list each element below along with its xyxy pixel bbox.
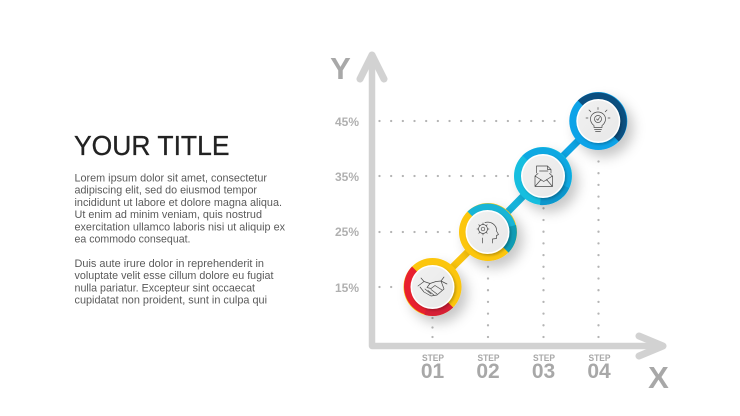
icon: handshake [418,277,447,296]
y-axis percentage labels [335,115,359,295]
icon: head with gear [477,222,498,243]
x-axis step labels: STEP [478,353,500,364]
text block: second paragraph: voluptate velit esse cillum dolore eu fugiat [74,270,274,282]
text block: second paragraph: Duis aute irure dolor in reprehenderit in [74,258,264,270]
x-axis step labels: STEP [533,353,556,364]
text block: first paragraph: ea commodo consequat. [74,234,190,246]
step 01 node [404,258,462,316]
y-axis percentage labels: 15% [335,281,359,295]
icon: light bulb [586,108,610,132]
text block: first paragraph [74,172,285,246]
horizontal dotted guide lines [380,121,566,287]
step 02 node [459,203,517,261]
text block: first paragraph: exercitation ullamco laboris nisi ut aliquip ex [74,221,285,233]
text block: first paragraph: Lorem ipsum dolor sit amet, consectetur [74,172,267,184]
y-axis percentage labels: 45% [335,115,359,129]
text block: first paragraph: incididunt ut labore et dolore magna aliqua. [74,197,282,209]
vertical dotted guide lines [432,150,598,337]
title: YOUR TITLE [74,130,230,161]
x-axis step labels: STEP [422,353,445,364]
y-axis percentage labels: 25% [335,225,359,239]
x-axis step labels [421,353,611,383]
x-axis step labels: STEP [588,353,611,364]
y-axis percentage labels: 35% [335,170,359,184]
connector lines [432,121,598,287]
text block: second paragraph [74,258,274,307]
axes with arrows [360,55,663,356]
icon: envelope with document [535,166,552,186]
x-axis step labels: 01 [421,360,444,383]
step 03 node [514,147,572,205]
x-axis step labels: 04 [587,360,611,383]
axis label: Y: Y [330,51,351,86]
x-axis step labels: 03 [532,360,555,383]
x-axis step labels: 02 [476,360,500,383]
text block: first paragraph: adipiscing elit, sed do eiusmod tempor [74,185,257,197]
text block: second paragraph: nulla pariatur. Excepteur sint occaecat [74,282,255,294]
step 04 node [569,92,627,150]
text block: second paragraph: cupidatat non proident, sunt in culpa qui [74,295,267,307]
text block: first paragraph: Ut enim ad minim veniam, quis nostrud [74,209,262,221]
axis label: X: X [648,360,669,395]
